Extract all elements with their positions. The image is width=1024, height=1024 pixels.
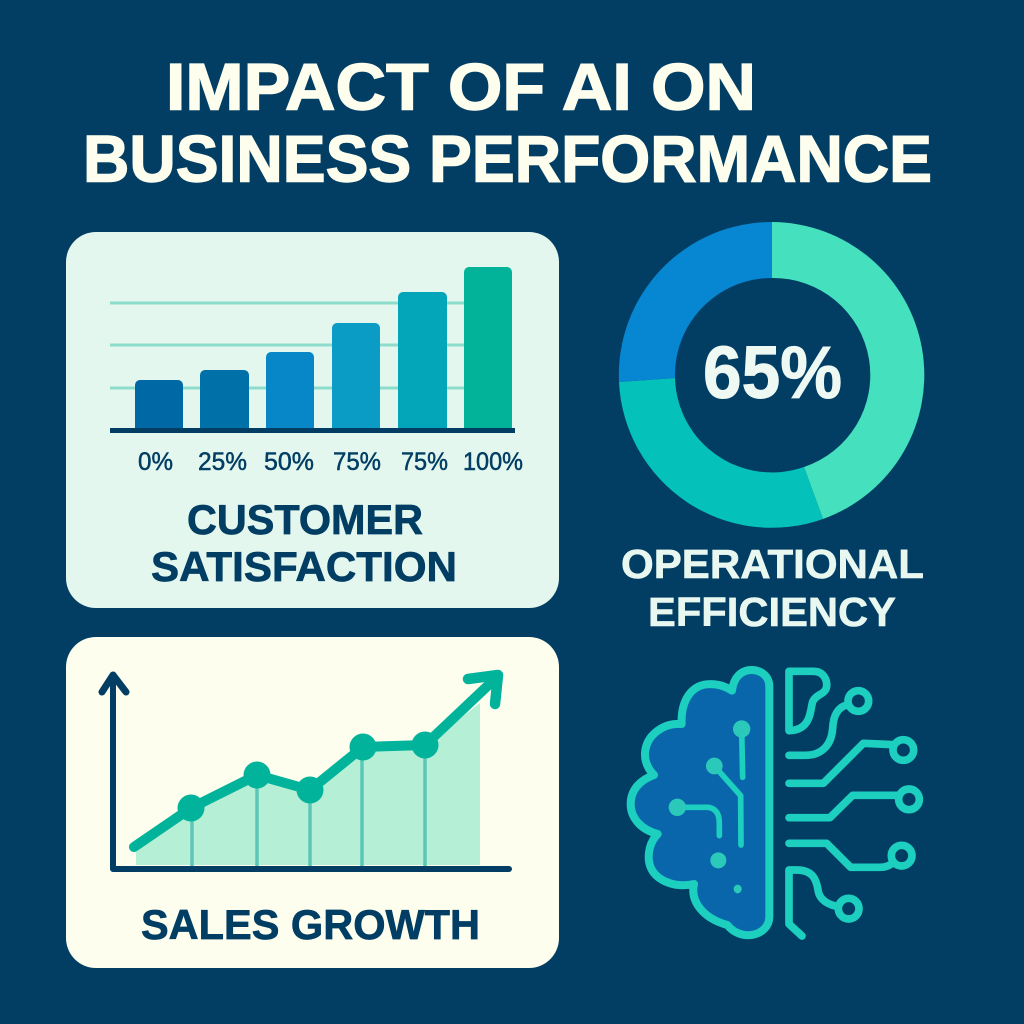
bar axis labels xyxy=(138,448,523,476)
donut label: operational efficiency xyxy=(621,541,924,635)
icon: AI brain circuit xyxy=(631,670,919,936)
panel label: customer satisfaction: SATISFACTION xyxy=(151,543,457,590)
bar axis labels: 25% xyxy=(198,448,247,476)
bar axis labels: 75% xyxy=(333,448,381,476)
panel label: sales growth: SALES GROWTH xyxy=(141,901,480,948)
line chart xyxy=(102,675,509,869)
donut value: 65% xyxy=(703,331,842,414)
bar axis labels: 50% xyxy=(264,448,314,476)
circuit traces xyxy=(789,671,919,936)
brain half outline xyxy=(631,670,769,935)
panel label: customer satisfaction xyxy=(151,496,457,590)
title: BUSINESS PERFORMANCE xyxy=(83,122,932,196)
panel: sales growth xyxy=(66,637,559,968)
panel: customer satisfaction xyxy=(66,232,559,608)
brain inner circuits xyxy=(669,720,750,893)
bar chart xyxy=(110,267,515,433)
donut label: operational efficiency: EFFICIENCY xyxy=(648,589,896,635)
bar axis labels: 100% xyxy=(463,448,523,476)
title: IMPACT OF AI ON xyxy=(166,50,756,124)
donut chart xyxy=(619,222,924,528)
bar axis labels: 0% xyxy=(138,448,173,476)
title xyxy=(83,50,932,196)
donut label: operational efficiency: OPERATIONAL xyxy=(621,541,924,587)
panel label: customer satisfaction: CUSTOMER xyxy=(187,496,423,543)
bar axis labels: 75% xyxy=(401,448,448,476)
